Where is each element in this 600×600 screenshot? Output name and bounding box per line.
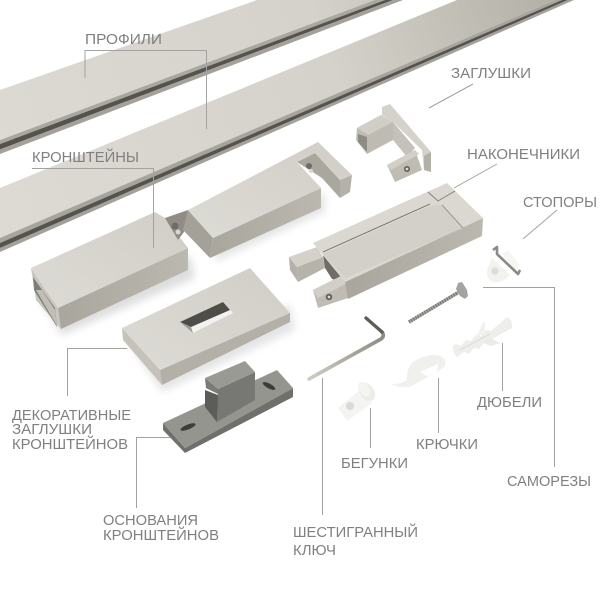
label: decorative bracket covers: КРОНШТЕЙНОВ — [12, 435, 128, 453]
bracket notch with screw — [165, 210, 188, 240]
profile rail upper — [0, 0, 403, 154]
label: brackets: КРОНШТЕЙНЫ — [32, 148, 139, 166]
leader lines — [32, 50, 557, 515]
bracket base — [163, 361, 293, 453]
label: plugs: ЗАГЛУШКИ — [451, 66, 531, 82]
label: runners: БЕГУНКИ — [341, 456, 408, 472]
label: stoppers: СТОПОРЫ — [523, 195, 597, 211]
label: decorative bracket covers — [12, 408, 131, 453]
label: bracket bases — [103, 513, 219, 544]
stopper — [487, 247, 520, 282]
label: dowels: ДЮБЕЛИ — [477, 395, 542, 411]
tip lower prong — [313, 276, 348, 308]
curtain hook — [391, 355, 446, 387]
label: bracket bases: КРОНШТЕЙНОВ — [103, 526, 219, 544]
label: screws: САМОРЕЗЫ — [507, 474, 591, 490]
decorative bracket cover — [122, 268, 295, 392]
label: hex key: КЛЮЧ — [293, 543, 336, 559]
screw — [409, 282, 468, 322]
hex key — [309, 318, 383, 379]
label: hooks: КРЮЧКИ — [416, 437, 478, 453]
label: decorative bracket covers: ЗАГЛУШКИ — [12, 422, 92, 438]
label: hex key — [293, 523, 418, 559]
tip upper prong — [289, 247, 325, 282]
label: profiles: ПРОФИЛИ — [85, 32, 162, 48]
bracket screw — [306, 163, 313, 173]
label: hex key: ШЕСТИГРАННЫЙ — [293, 523, 418, 541]
label: decorative bracket covers: ДЕКОРАТИВНЫЕ — [12, 408, 131, 424]
label: bracket bases: ОСНОВАНИЯ — [103, 513, 198, 529]
runner — [338, 380, 378, 421]
label: tips: НАКОНЕЧНИКИ — [467, 147, 580, 163]
bracket: left section — [31, 210, 195, 335]
bracket: right section — [183, 142, 352, 262]
profile rail lower — [0, 0, 574, 252]
end cap plug — [356, 104, 431, 182]
dowel — [453, 317, 512, 357]
end tip — [289, 183, 483, 308]
